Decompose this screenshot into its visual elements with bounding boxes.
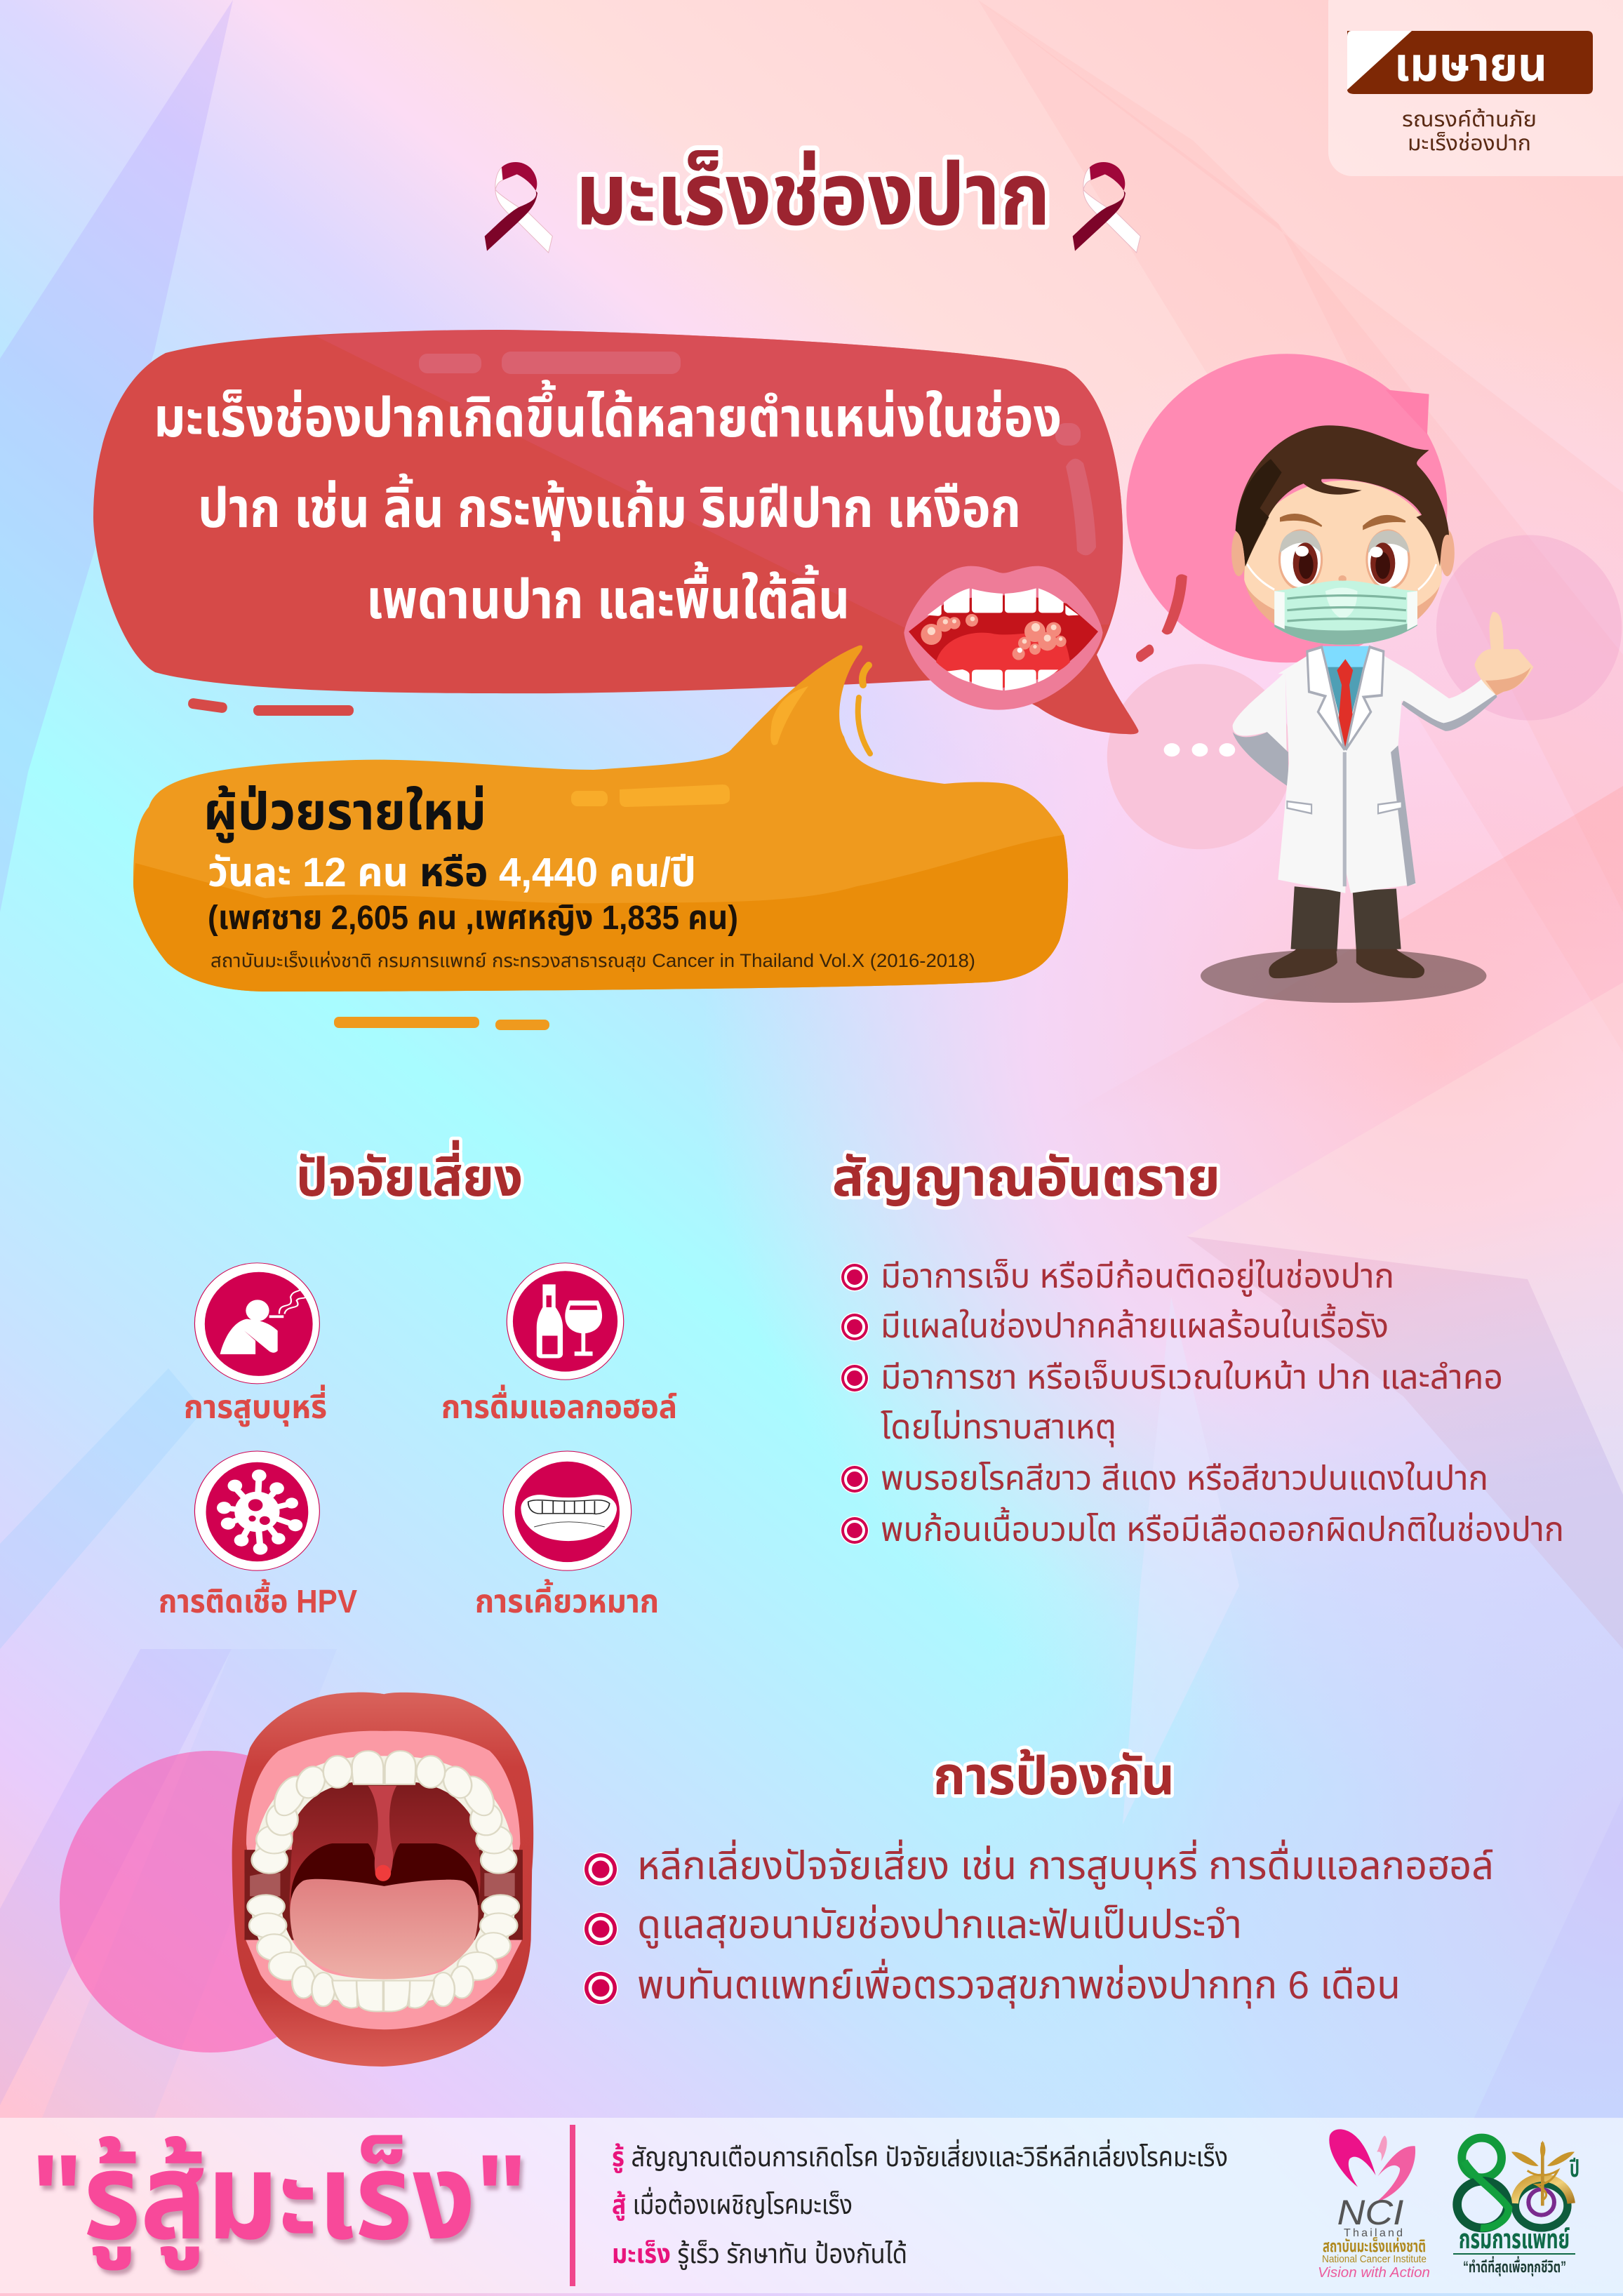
list text: มีอาการเจ็บ หรือมีก้อนติดอยู่ในช่องปาก bbox=[881, 1258, 1394, 1297]
logo: Department of Medical Services 80 years: “ทำดีที่สุดเพื่อทุกชีวิต” bbox=[1463, 2256, 1566, 2276]
doctor head bbox=[1231, 425, 1455, 645]
list text: มีแผลในช่องปากคล้ายแผลร้อนในเรื้อรัง bbox=[881, 1303, 1389, 1345]
month caption bbox=[1402, 108, 1537, 155]
footer description: สู้ เมื่อต้องเผชิญโรคมะเร็ง bbox=[612, 2187, 853, 2221]
panel: risk factor icons bbox=[159, 1263, 677, 1620]
month badge: เมษายน bbox=[1394, 38, 1547, 91]
new patients text: (เพศชาย 2,605 คน ,เพศหญิง 1,835 คน) bbox=[208, 900, 738, 937]
month tab panel bbox=[1328, 0, 1623, 176]
bubble text bbox=[154, 380, 1062, 630]
logo: Department of Medical Services 80 years: ปี bbox=[1570, 2156, 1579, 2182]
lips bbox=[232, 1693, 533, 2067]
footer description: มะเร็ง รู้เร็ว รักษาทัน ป้องกันได้ bbox=[612, 2240, 907, 2270]
panel: orange new patients bubble bbox=[133, 646, 1068, 1030]
icon: smoking bbox=[194, 1263, 319, 1384]
lower teeth bbox=[248, 1895, 519, 2012]
mouth interior bbox=[244, 1850, 523, 1940]
doctor shadow bbox=[1201, 949, 1486, 1003]
doctor hand bbox=[1474, 612, 1533, 695]
prevention text bbox=[637, 1839, 1494, 2008]
doctor collar and tie bbox=[1307, 646, 1384, 750]
list text: พบรอยโรคสีขาว สีแดง หรือสีขาวปนแดงในปาก bbox=[881, 1460, 1488, 1497]
month caption: รณรงค์ต้านภัย bbox=[1402, 108, 1537, 131]
logo: National Cancer Institute: National Cancer Institute bbox=[1322, 2253, 1427, 2265]
month badge bbox=[1347, 31, 1593, 94]
month caption: มะเร็งช่องปาก bbox=[1408, 132, 1531, 155]
new patients text: สถาบันมะเร็งแห่งชาติ กรมการแพทย์ กระทรวงสาธารณสุข Cancer in Thailand Vol.X (2016-2018) bbox=[211, 950, 975, 972]
title: มะเร็งช่องปาก bbox=[575, 147, 1050, 243]
risk factor labels: การดื่มแอลกอฮอล์ bbox=[441, 1384, 677, 1425]
small mouth with sores bbox=[904, 566, 1103, 710]
doctor shoes bbox=[1269, 949, 1424, 978]
doctor character bbox=[1201, 425, 1533, 1003]
heading: warning signs: สัญญาณอันตราย bbox=[832, 1148, 1220, 1208]
face mask bbox=[1274, 580, 1417, 645]
logo: National Cancer Institute: Thailand bbox=[1344, 2227, 1403, 2239]
list text bbox=[881, 1258, 1564, 1549]
doctor background blobs bbox=[1107, 354, 1622, 849]
list bullets bbox=[841, 1264, 868, 1544]
footer slogan: "รู้สู้มะเร็ง" bbox=[31, 2130, 528, 2271]
panel: footer bbox=[0, 2118, 1623, 2293]
logo: Department of Medical Services 80 years bbox=[1453, 2138, 1579, 2276]
icon: ribbon left bbox=[485, 162, 552, 253]
new patients text: ผู้ป่วยรายใหม่ bbox=[203, 782, 486, 843]
list text: มีอาการชา หรือเจ็บบริเวณใบหน้า ปาก และลำคอ bbox=[881, 1359, 1503, 1396]
heading: risk factors: ปัจจัยเสี่ยง bbox=[296, 1140, 523, 1208]
prevention text: พบทันตแพทย์เพื่อตรวจสุขภาพช่องปากทุก 6 เดือน bbox=[637, 1958, 1401, 2008]
panel: red speech bubble bbox=[93, 330, 1139, 734]
footer description: รู้ สัญญาณเตือนการเกิดโรค ปัจจัยเสี่ยงและวิธีหลีกเลี่ยงโรคมะเร็ง bbox=[612, 2139, 1228, 2173]
prevention text: หลีกเลี่ยงปัจจัยเสี่ยง เช่น การสูบบุหรี่ การดื่มแอลกอฮอล์ bbox=[637, 1839, 1494, 1890]
open mouth illustration bbox=[232, 1693, 533, 2067]
logo: National Cancer Institute: Vision with Action bbox=[1318, 2265, 1430, 2281]
list text: โดยไม่ทราบสาเหตุ bbox=[881, 1409, 1116, 1448]
logo: National Cancer Institute: สถาบันมะเร็งแห่งชาติ bbox=[1323, 2236, 1426, 2256]
icon: alcohol bbox=[507, 1263, 624, 1380]
icon: HPV virus bbox=[194, 1451, 319, 1570]
icon: betel chewing bbox=[503, 1451, 632, 1570]
risk factor labels: การสูบบุหรี่ bbox=[184, 1384, 327, 1427]
risk factor labels bbox=[159, 1384, 677, 1620]
bubble text: ปาก เช่น ลิ้น กระพุ้งแก้ม ริมฝีปาก เหงือก bbox=[198, 474, 1021, 541]
panel: prevention list bbox=[585, 1839, 1494, 2008]
bubble text: มะเร็งช่องปากเกิดขึ้นได้หลายตำแหน่งในช่อง bbox=[154, 380, 1062, 448]
heading: prevention: การป้องกัน bbox=[933, 1747, 1175, 1806]
footer description bbox=[612, 2139, 1228, 2270]
bubble text: เพดานปาก และพื้นใต้ลิ้น bbox=[366, 561, 850, 630]
upper teeth bbox=[252, 1751, 516, 1874]
risk factor labels: การติดเชื้อ HPV bbox=[159, 1579, 357, 1620]
prevention bullets bbox=[585, 1853, 617, 2004]
prevention text: ดูแลสุขอนามัยช่องปากและฟันเป็นประจำ bbox=[637, 1902, 1242, 1949]
logo: National Cancer Institute bbox=[1318, 2129, 1430, 2281]
eyes bbox=[1279, 530, 1409, 589]
list text: พบก้อนเนื้อบวมโต หรือมีเลือดออกผิดปกติในช่องปาก bbox=[881, 1507, 1564, 1549]
doctor coat bbox=[1233, 647, 1497, 893]
icon: ribbon right bbox=[1073, 162, 1140, 253]
pink circle behind open mouth bbox=[60, 1751, 361, 2053]
logo: Department of Medical Services 80 years: กรมการแพทย์ bbox=[1459, 2225, 1570, 2255]
logo: National Cancer Institute: NCI bbox=[1337, 2193, 1404, 2232]
risk factor labels: การเคี้ยวหมาก bbox=[475, 1579, 659, 1620]
new patients text bbox=[203, 782, 975, 972]
doctor legs bbox=[1291, 886, 1401, 952]
panel: warning signs list bbox=[841, 1258, 1564, 1549]
new patients text: วันละ 12 คน หรือ 4,440 คน/ปี bbox=[208, 850, 696, 895]
